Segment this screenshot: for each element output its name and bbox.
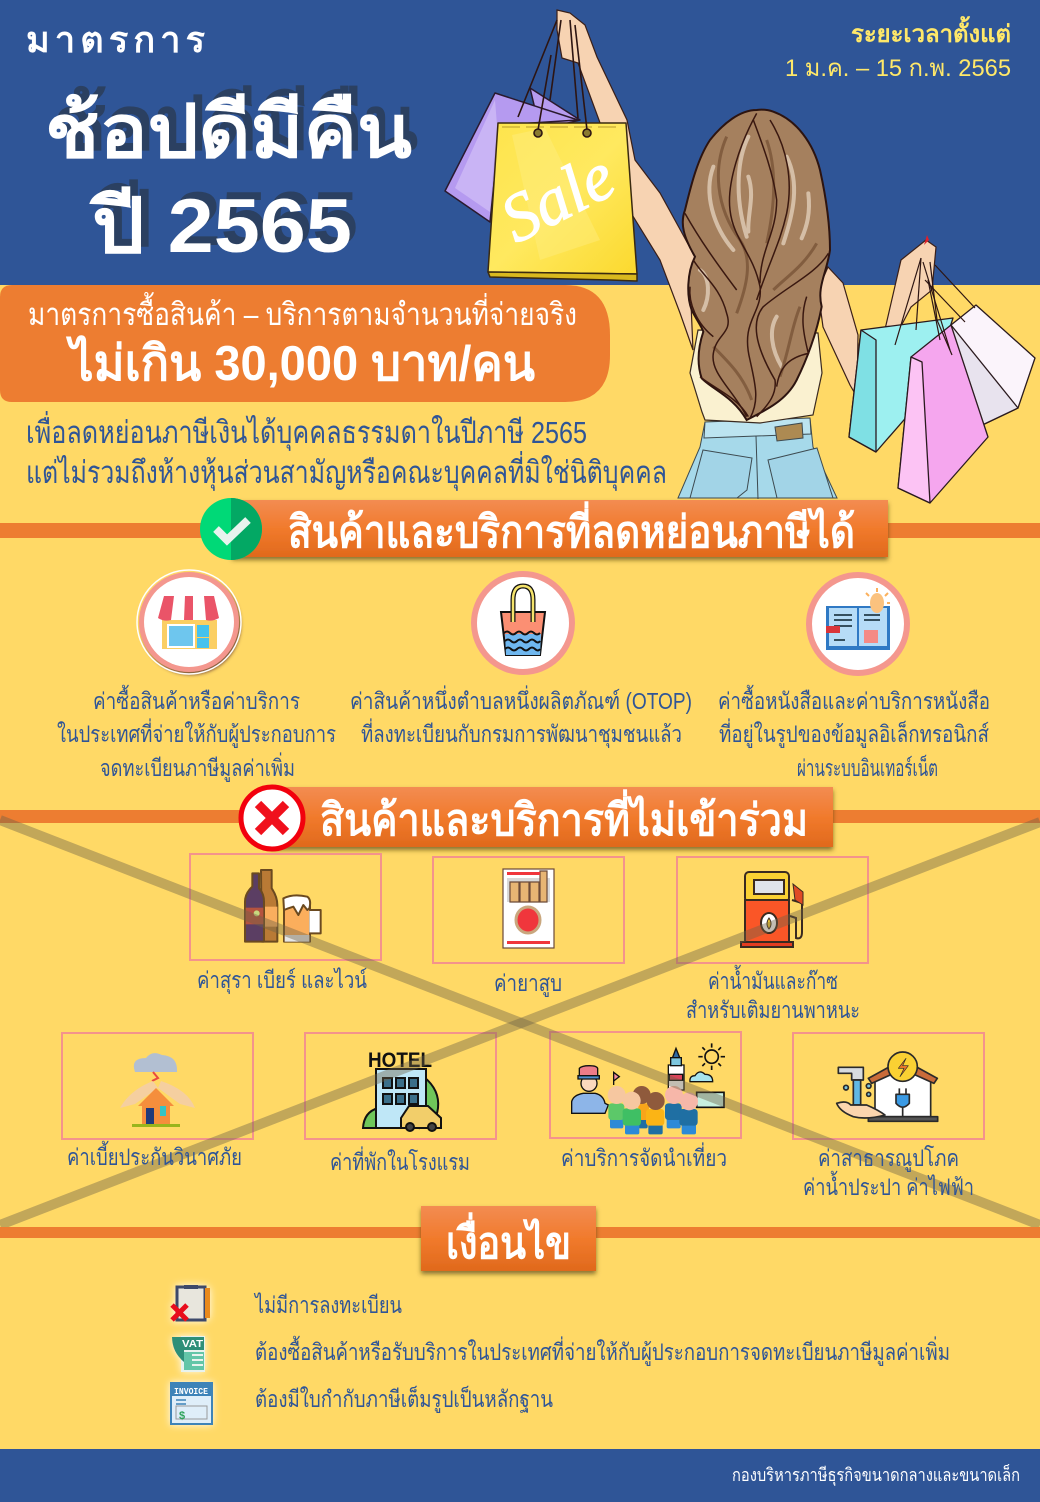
date range — [785, 15, 1011, 82]
orange pill: spending limit: ไม่เกิน 30,000 บาท/คน — [65, 334, 535, 391]
orange pill: spending limit — [0, 285, 610, 402]
excluded item labels: ค่าเบี้ยประกันวินาศภัย — [67, 1141, 242, 1170]
icon: invoice — [171, 1383, 212, 1424]
excluded item labels: ค่าน้ำประปา ค่าไฟฟ้า — [803, 1171, 974, 1200]
banner: excluded goods and services: สินค้าและบริการที่ไม่เข้าร่วม — [320, 789, 808, 845]
excluded item labels — [67, 965, 974, 1200]
date range: ระยะเวลาตั้งแต่ — [851, 15, 1011, 48]
icon: tour group — [572, 1043, 725, 1134]
right shoulder and arm — [818, 267, 858, 397]
cloud — [690, 1072, 713, 1082]
long hair — [683, 110, 830, 420]
right-hand bag strings — [895, 258, 975, 355]
panel: eligible item 1 shop — [57, 570, 336, 782]
icon: woven bag — [474, 574, 572, 672]
jeans — [678, 418, 837, 499]
text — [718, 685, 990, 781]
excluded item labels: สำหรับเติมยานพาหนะ — [686, 997, 860, 1023]
divider band: eligible — [0, 523, 1040, 538]
right forearm and hand — [882, 240, 936, 340]
banner: conditions: เงื่อนไข — [446, 1212, 571, 1268]
excluded item labels: ค่ายาสูบ — [494, 970, 562, 997]
icon: cigarette pack — [503, 869, 554, 948]
conditions list: ต้องมีใบกำกับภาษีเต็มรูปเป็นหลักฐาน — [255, 1384, 553, 1413]
icon: green check — [200, 498, 262, 560]
panel: eligible item 2 OTOP — [350, 574, 692, 748]
purple bag — [445, 88, 580, 222]
icon: invoice: $ — [179, 1410, 185, 1422]
text: ที่ลงทะเบียนกับกรมการพัฒนาชุมชนแล้ว — [361, 718, 682, 748]
right-hand shopping bags — [849, 305, 1035, 503]
orange pill: spending limit: มาตรการซื้อสินค้า – บริการตามจำนวนที่จ่ายจริง — [28, 292, 577, 332]
text — [350, 685, 692, 748]
icon: hotel — [363, 1049, 441, 1131]
cross-out lines over excluded items — [0, 820, 1040, 1225]
excluded item labels: ค่าสาธารณูปโภค — [818, 1145, 959, 1172]
footer: blue bar — [0, 1449, 1040, 1502]
group of people — [608, 1086, 698, 1134]
conditions list: ไม่มีการลงทะเบียน — [253, 1292, 402, 1318]
conditions list — [253, 1292, 950, 1413]
icon: house insurance — [120, 1053, 195, 1127]
text: ที่อยู่ในรูปของข้อมูลอิเล็กทรอนิกส์ — [719, 718, 989, 748]
icon: alcohol — [245, 870, 321, 942]
sale text: Sale — [488, 137, 626, 257]
text: ค่าซื้อสินค้าหรือค่าบริการ — [93, 685, 300, 714]
sign — [697, 1092, 724, 1107]
icon: hotel: HOTEL — [368, 1049, 432, 1072]
excluded item labels: ค่าสุรา เบียร์ และไวน์ — [197, 967, 367, 994]
icon: utilities — [837, 1052, 938, 1121]
icon: open book — [809, 575, 907, 673]
icon: shop — [137, 570, 241, 674]
lead text: แต่ไม่รวมถึงห้างหุ้นส่วนสามัญหรือคณะบุคคลที่มิใช่นิติบุคคล — [26, 451, 667, 492]
header: blue background — [0, 0, 1040, 285]
tour guide — [572, 1066, 619, 1113]
icon: red cross — [241, 787, 303, 849]
cream top — [690, 330, 822, 423]
title: main heading: ช้อปดีมีคืน — [53, 82, 418, 165]
red nail — [924, 235, 929, 245]
text: จดทะเบียนภาษีมูลค่าเพิ่ม — [100, 752, 295, 782]
excluded item labels: ค่าบริการจัดนำเที่ยว — [561, 1142, 727, 1171]
banner: eligible goods and services: สินค้าและบริการที่ลดหย่อนภาษีได้ — [288, 501, 855, 557]
text — [57, 685, 336, 782]
lead text: เพื่อลดหย่อนภาษีเงินได้บุคคลธรรมดาในปีภาษี 2565 — [26, 411, 587, 452]
icon: fuel pump — [741, 872, 803, 947]
excluded item labels: ค่าที่พักในโรงแรม — [330, 1146, 470, 1175]
title: main heading: ปี 2565 — [97, 177, 358, 262]
divider band: conditions — [0, 1227, 1040, 1238]
divider band: excluded — [0, 810, 1040, 823]
excluded item labels: ค่าน้ำมันและก๊าซ — [708, 965, 838, 994]
icon: invoice: INVOICE — [174, 1387, 209, 1397]
panel: excluded item frames — [62, 854, 984, 1139]
sun — [698, 1043, 725, 1070]
title: measure label: มาตรการ — [26, 19, 206, 60]
date range: 1 ม.ค. – 15 ก.พ. 2565 — [785, 55, 1011, 82]
yellow sale bag — [488, 123, 637, 281]
lead text — [26, 411, 667, 492]
lighthouse — [668, 1048, 684, 1090]
icon: VAT document — [172, 1336, 205, 1372]
title: main heading — [45, 82, 418, 269]
panel: eligible item 3 e-book — [718, 575, 990, 781]
banner: conditions — [421, 1206, 596, 1271]
icon: no registration — [172, 1285, 210, 1320]
title: main heading: ช้อปดีมีคืน — [45, 90, 412, 173]
text: ในประเทศที่จ่ายให้กับผู้ประกอบการ — [57, 718, 336, 748]
illustration: woman with shopping bags — [445, 10, 1035, 503]
title: main heading: ปี 2565 — [89, 184, 352, 269]
bag handles — [518, 20, 591, 137]
icon: VAT document: VAT — [182, 1339, 203, 1350]
text: ผ่านระบบอินเทอร์เน็ต — [797, 753, 938, 781]
text: ค่าสินค้าหนึ่งตำบลหนึ่งผลิตภัณฑ์ (OTOP) — [350, 685, 692, 714]
raised arm — [557, 10, 695, 350]
